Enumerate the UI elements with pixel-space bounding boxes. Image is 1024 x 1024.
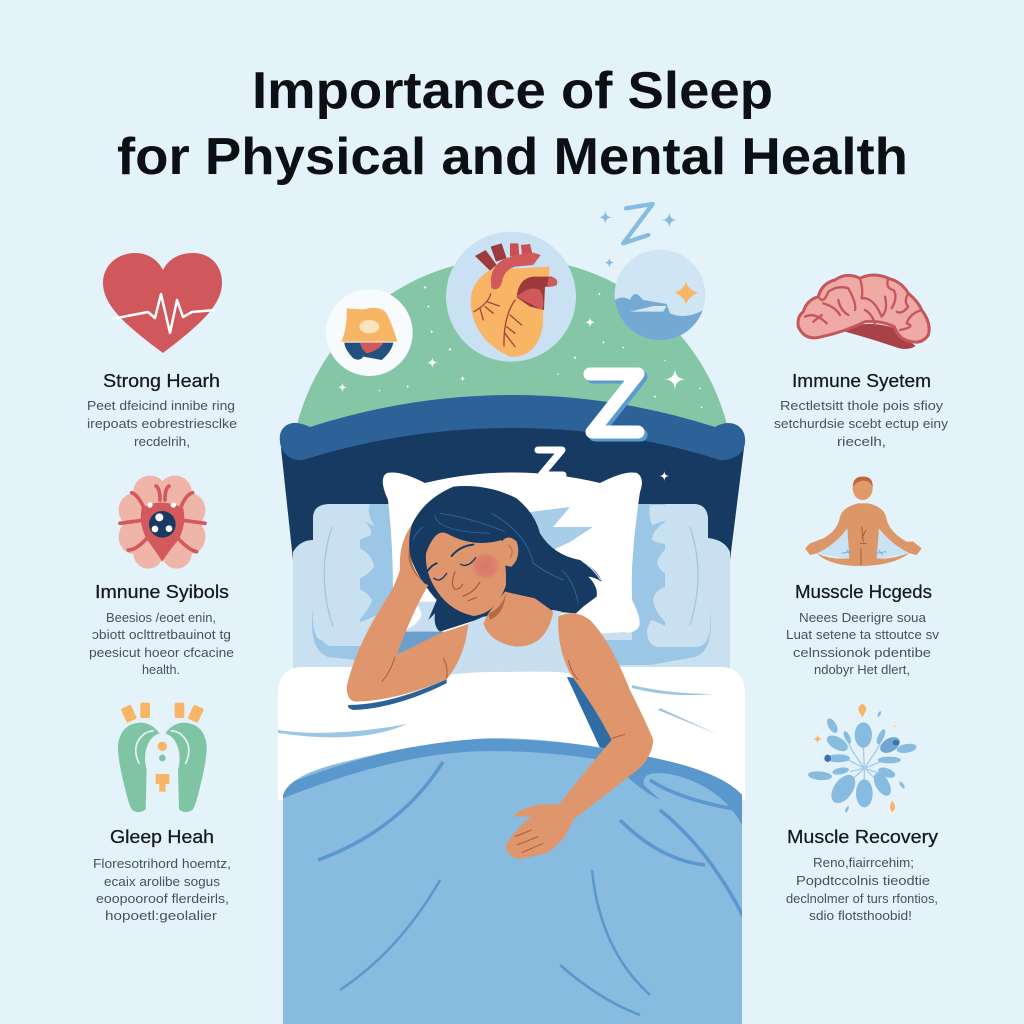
orb: mask / cap xyxy=(326,289,413,376)
green dream dome xyxy=(290,258,734,702)
icon: meditating figure xyxy=(805,477,922,566)
woman torso and hair xyxy=(395,486,602,687)
bed headboard xyxy=(280,395,745,560)
panel: strong heart (left top) xyxy=(87,253,237,449)
panel: gleep heah (left bottom) xyxy=(93,703,231,923)
description: Rectletsitt thole pois sfioy xyxy=(780,399,944,413)
description xyxy=(786,856,938,923)
floating health orbs xyxy=(326,232,705,376)
floating blue z with stars xyxy=(598,204,678,268)
orb: night landscape xyxy=(613,250,705,343)
description: peesicut hoeor cfcacine xyxy=(89,646,234,660)
panel: immune symbols (left middle) xyxy=(89,476,234,677)
central illustration: sleeping woman in bed xyxy=(275,258,750,1024)
tank top xyxy=(447,610,573,687)
description: Beesios /eoet enin, xyxy=(106,611,216,625)
long hair xyxy=(407,486,602,632)
description: Neees Deerigre soua xyxy=(799,611,926,625)
panel: immune system (right top) xyxy=(774,275,949,449)
description: Popdtccolnis tieodtie xyxy=(796,874,930,888)
description xyxy=(87,399,237,449)
arms xyxy=(347,525,653,859)
description: recdelrih, xyxy=(134,435,190,449)
ear xyxy=(502,537,518,567)
neck xyxy=(483,592,553,647)
face xyxy=(426,532,506,616)
raised arm xyxy=(347,525,468,702)
description: ɔbiott oclttretbauinot tg xyxy=(92,628,231,642)
description: sdio flotsthoobid! xyxy=(809,909,912,923)
panel: muscle heads (right middle) xyxy=(786,477,940,677)
description: health. xyxy=(142,663,180,677)
heading: Immune Syetem xyxy=(792,371,931,391)
description: Luat setene ta sttoutce sv xyxy=(786,628,940,642)
white cover over torso xyxy=(340,672,600,763)
description: irepoats eobrestriesclke xyxy=(87,417,237,431)
title: Importance of Sleep xyxy=(252,62,773,120)
description: ndobyr Het dlert, xyxy=(814,663,910,677)
title xyxy=(117,62,908,186)
blue blanket xyxy=(275,738,750,1024)
icon: pink brain with nucleus xyxy=(119,476,205,569)
heading: Imnune Syibols xyxy=(95,582,229,602)
sheet creases xyxy=(632,685,717,734)
heading: Musscle Hcgeds xyxy=(795,582,932,602)
description xyxy=(89,611,234,677)
closed eyes brows and smile xyxy=(427,545,480,601)
description: hopoetl:geolalier xyxy=(105,909,217,923)
description: riecelh, xyxy=(837,435,886,449)
icon: blue flower xyxy=(808,703,917,813)
large z xyxy=(590,374,641,435)
pillow gap behind arm xyxy=(395,602,443,655)
description: Floresotrihord hoemtz, xyxy=(93,857,231,871)
title: for Physical and Mental Health xyxy=(117,128,908,186)
white bed sheet xyxy=(278,667,745,800)
blush cheek xyxy=(471,552,500,580)
lower arm and hand xyxy=(506,613,653,859)
description: Peet dfeicind innibe ring xyxy=(87,399,235,413)
description xyxy=(93,857,231,923)
fringe hair strands xyxy=(413,513,578,603)
description: ecaix arolibe sogus xyxy=(104,875,220,889)
heading: Strong Hearh xyxy=(103,371,220,391)
centre pillow xyxy=(383,472,642,640)
orb: anatomical heart xyxy=(446,232,576,362)
sleep stars on dome xyxy=(337,285,703,481)
description: Reno,fiairrcehim; xyxy=(813,856,914,870)
description xyxy=(774,399,949,449)
icon: brain xyxy=(798,275,929,349)
description: setchurdsie scebt ectup einy xyxy=(774,417,949,431)
panel: muscle recovery (right bottom) xyxy=(786,703,938,923)
heading: Muscle Recovery xyxy=(787,827,938,847)
icon: heart with ECG xyxy=(103,253,222,353)
small z on pillow xyxy=(538,450,563,475)
description: celnssionok pdentibe xyxy=(793,646,931,660)
heading: Gleep Heah xyxy=(110,827,214,847)
icon: green feet xyxy=(118,703,207,812)
description: eoopooroof flerdeirls, xyxy=(96,892,229,906)
description xyxy=(786,611,940,677)
description: declnolmer of turs rfontios, xyxy=(786,892,938,906)
side pillows xyxy=(293,504,730,672)
